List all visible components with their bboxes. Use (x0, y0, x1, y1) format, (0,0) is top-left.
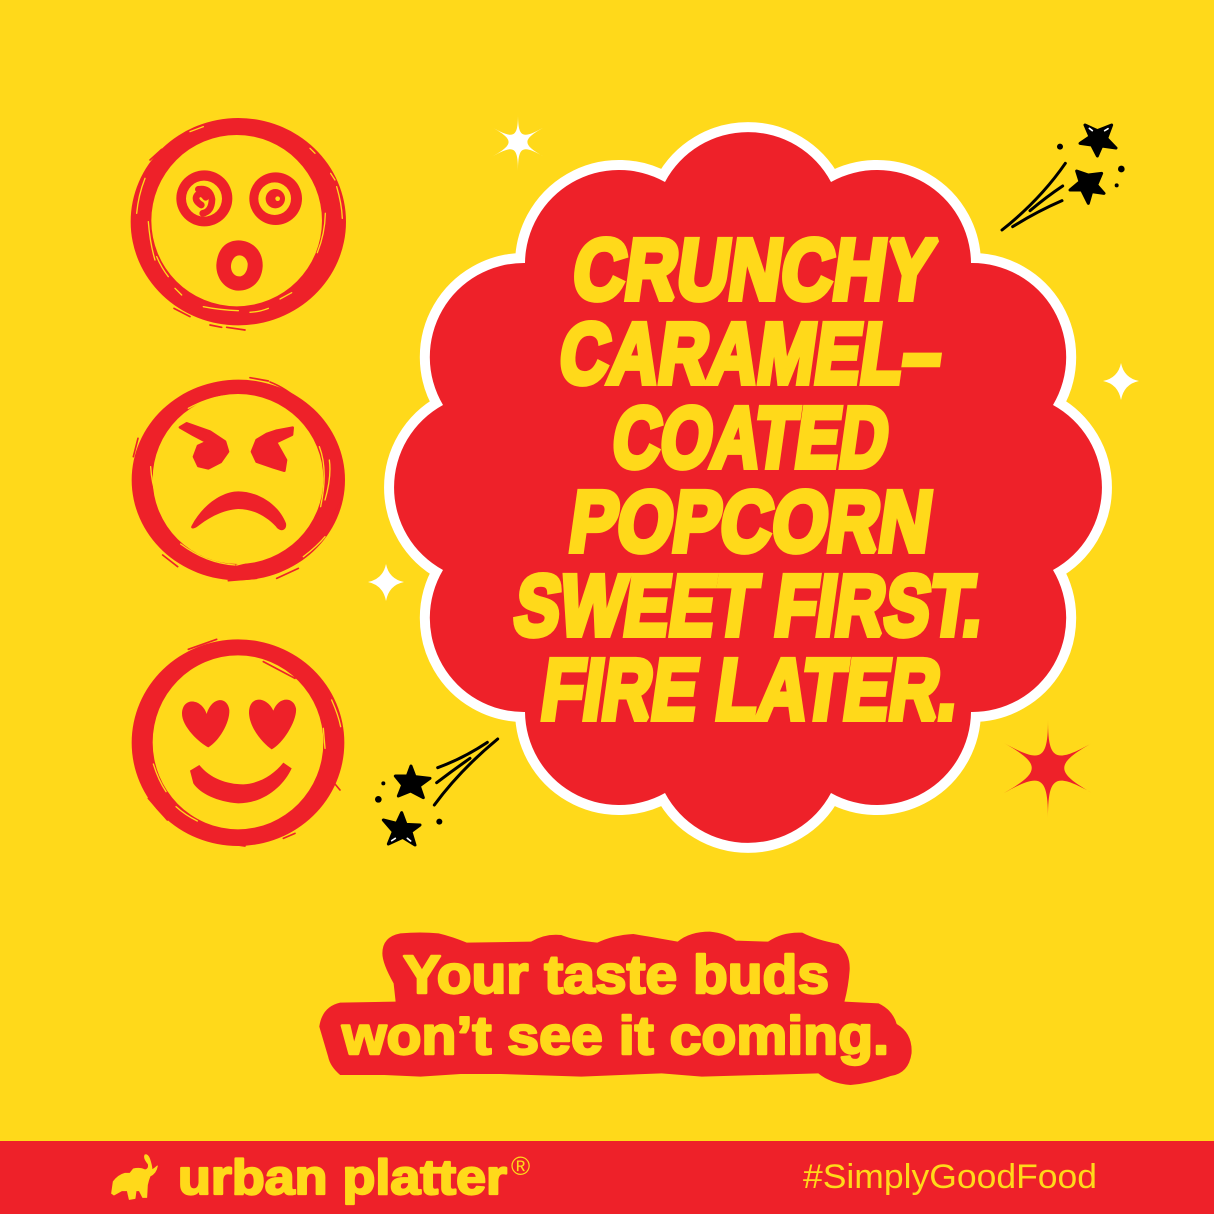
headline: FIRE LATER. (536, 642, 965, 738)
right angry eye (252, 428, 293, 471)
headline: CRUNCHY (567, 222, 941, 318)
icon: dizzy shocked face (131, 118, 346, 330)
registered mark: ® (511, 1151, 530, 1181)
face ring (132, 380, 345, 580)
icon: white sparkle right (1103, 363, 1139, 400)
face ring (132, 639, 344, 846)
icon: elephant logo (112, 1155, 157, 1199)
headline (509, 222, 990, 738)
left angry eye (180, 423, 228, 468)
icon: shooting stars bottom left (375, 739, 498, 845)
panel: scalloped cloud callout (394, 132, 1102, 843)
open mouth (216, 240, 263, 291)
tagline red outline (319, 932, 912, 1085)
ring scratches (151, 396, 330, 565)
headline: COATED (607, 390, 895, 486)
icon: red sparkle (1004, 720, 1092, 818)
icon: white sparkle left (368, 564, 404, 601)
icon: shooting stars top right (1002, 125, 1125, 230)
ring flecks (133, 378, 343, 581)
tagline text: Your taste buds (403, 945, 829, 1005)
tagline badge (319, 932, 912, 1085)
ring scratches (137, 127, 342, 312)
headline: POPCORN (564, 474, 938, 570)
icon: heart-eyes smiling face (132, 639, 344, 846)
hashtag: #SimplyGoodFood (803, 1158, 1097, 1196)
left heart eye (182, 700, 229, 747)
left spiral eye (176, 170, 232, 226)
right spiral eye (249, 172, 302, 225)
cloud white border (394, 132, 1102, 843)
icon: angry face (132, 378, 345, 581)
ring scratches (153, 650, 341, 827)
smile (190, 763, 292, 803)
cloud red fill (394, 132, 1102, 843)
tagline text (341, 945, 889, 1066)
tagline text: won’t see it coming. (341, 1006, 889, 1066)
frown (191, 491, 286, 530)
right heart eye (249, 700, 296, 749)
brand name: urban platter (178, 1151, 507, 1205)
footer band (0, 1141, 1214, 1214)
face ring (131, 118, 346, 325)
headline: SWEET FIRST. (509, 558, 990, 654)
ring flecks (148, 639, 340, 846)
footer background (0, 1141, 1214, 1214)
headline: CARAMEL– (554, 306, 948, 402)
icon: white sparkle top (492, 114, 544, 171)
ring flecks (150, 149, 245, 330)
